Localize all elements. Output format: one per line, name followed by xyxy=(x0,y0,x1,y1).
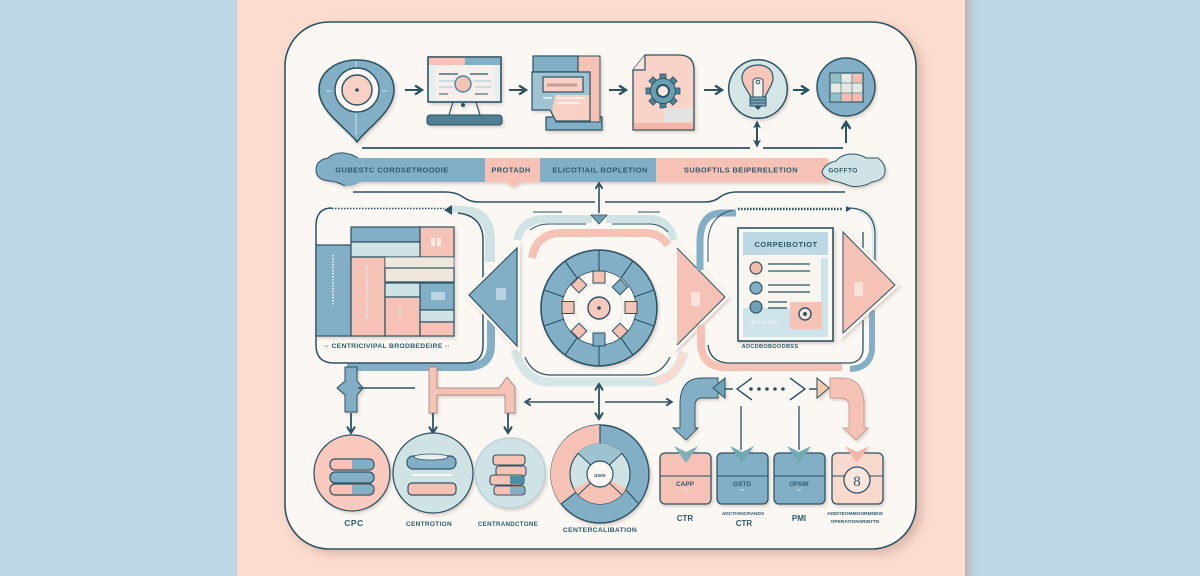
dark inner outline xyxy=(708,232,863,363)
CPC label: CPC xyxy=(344,518,364,528)
horizontal two-way arrow xyxy=(526,401,671,403)
box captions: OPERATIONSRINTTE xyxy=(831,519,880,525)
pink connector xyxy=(429,367,515,413)
triangle: right pink xyxy=(843,232,895,333)
treemap chart xyxy=(316,227,454,336)
donut chart xyxy=(551,425,649,534)
card caption: ADCDBOBOODBSS xyxy=(742,344,798,350)
arrow xyxy=(793,89,807,91)
arrow xyxy=(704,89,721,91)
box captions: CTR xyxy=(736,519,752,528)
metric boxes xyxy=(660,446,884,528)
box 4 xyxy=(832,446,883,504)
band segment blue xyxy=(540,158,656,182)
triangle: center pink xyxy=(677,248,725,345)
circle 2 label: CENTROTION xyxy=(406,521,452,528)
box 1 xyxy=(660,446,711,504)
band labels: GOFFTO xyxy=(828,168,858,174)
left cloud end xyxy=(316,153,485,186)
circle 3 xyxy=(475,438,545,508)
circle 1: CPC xyxy=(314,435,390,511)
band labels: GUBESTC CORDSETROODIE xyxy=(335,166,449,174)
box 3: ctrl xyxy=(797,488,802,492)
band segment pink xyxy=(656,158,828,182)
dotted middle with chevrons xyxy=(725,378,817,450)
pink curved arrow xyxy=(817,378,868,440)
blue loop top xyxy=(700,213,736,270)
box 4: 8 xyxy=(853,474,861,490)
connector lines to band xyxy=(362,122,846,148)
band labels: SUBOFTILS BEIPERELETION xyxy=(684,166,798,174)
box captions: PMI xyxy=(792,514,806,523)
pale loop xyxy=(517,219,674,240)
left panel: treemap xyxy=(316,205,491,367)
donut center label: uses xyxy=(594,473,606,479)
blue curved arrow xyxy=(673,378,725,440)
treemap caption: ·· CENTRICIVIPAL BRODBEDEIRE ·· xyxy=(324,343,450,350)
upper connector lines xyxy=(353,184,845,213)
band labels: PROTADH xyxy=(491,166,531,174)
band labels xyxy=(335,166,858,174)
pink card badge xyxy=(790,302,822,329)
timeline band xyxy=(316,153,885,187)
database circles xyxy=(314,433,545,528)
card title: CORPEIBOTIOT xyxy=(754,240,818,249)
box 3 xyxy=(774,446,825,504)
lower left connectors xyxy=(337,367,671,432)
checklist items xyxy=(750,262,810,313)
donut label: CENTERCALIBATION xyxy=(563,527,637,534)
box 1: CAPP xyxy=(676,481,695,488)
box 3: OPSIM xyxy=(789,482,809,488)
blue loop band xyxy=(347,320,491,367)
box captions: ADCTIONCRANDS xyxy=(722,511,765,517)
wheel xyxy=(541,250,657,366)
panel outline xyxy=(316,208,483,363)
blue loop right xyxy=(850,310,872,369)
box captions: CTR xyxy=(677,514,693,523)
circle 3 label: CENTRANDCTONE xyxy=(478,521,538,528)
vertical two-way arrow xyxy=(598,385,600,418)
triangle: left blue xyxy=(469,248,517,346)
card xyxy=(738,228,833,341)
icon: light bulb xyxy=(729,60,787,118)
pale loop band xyxy=(450,211,490,262)
band segment pink xyxy=(485,158,540,187)
white main panel xyxy=(285,22,916,549)
center wheel with loops xyxy=(515,212,684,382)
right panel: checklist card xyxy=(700,206,895,369)
box 2: ctrl xyxy=(740,488,745,492)
box 1: ctrl xyxy=(683,488,688,492)
icon: monitor xyxy=(427,57,502,125)
icon: location pin xyxy=(319,60,394,142)
box 2 xyxy=(717,446,768,504)
top chevron connectors xyxy=(673,378,868,450)
arrow xyxy=(405,89,421,91)
box 2: GSTD xyxy=(733,481,751,488)
pink loop bottom xyxy=(701,325,842,367)
card: Bumnx4kt xyxy=(751,320,779,326)
icon: documents xyxy=(532,56,602,130)
lower loop xyxy=(515,350,684,382)
pink board xyxy=(237,0,965,576)
pink loop xyxy=(532,233,668,258)
arrow xyxy=(509,89,525,91)
box captions: ADDITEOMMOORMNDIS xyxy=(827,511,884,517)
box captions xyxy=(677,511,884,528)
circle 2 xyxy=(393,433,473,513)
top process row xyxy=(319,55,875,142)
right cloud end xyxy=(822,154,885,186)
icon: gear document xyxy=(633,55,694,130)
blue connector xyxy=(337,367,363,412)
treemap glyph marks xyxy=(333,238,445,320)
icon: table circle xyxy=(817,58,875,116)
band labels: ELICOTIAIL BOPLETION xyxy=(552,166,648,174)
arrow xyxy=(609,89,625,91)
